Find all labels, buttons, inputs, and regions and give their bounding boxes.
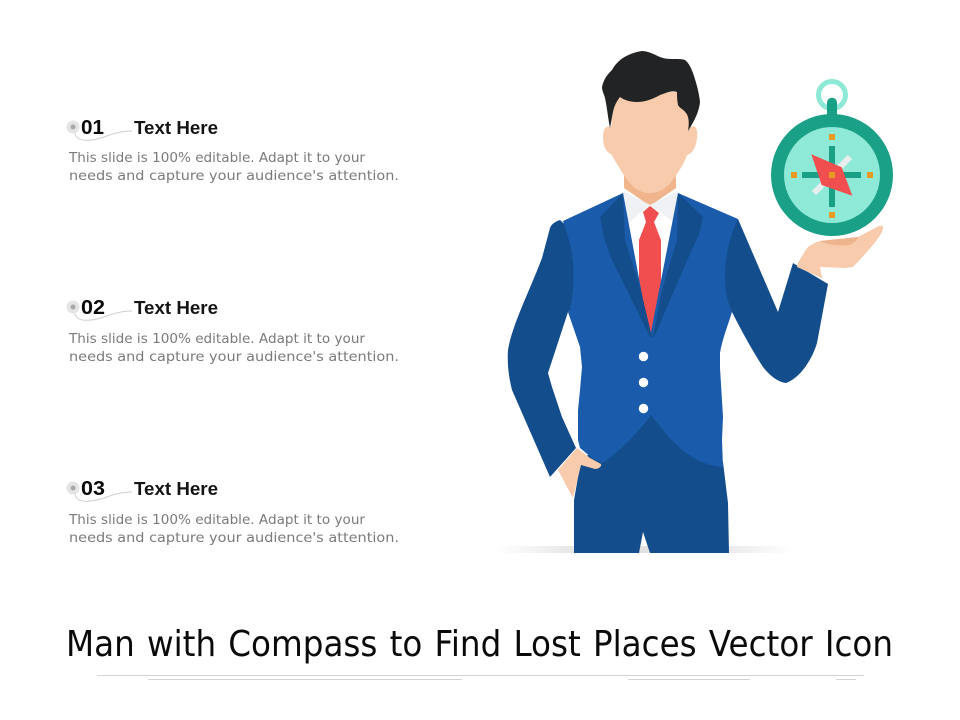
number 01: 01 <box>81 117 104 139</box>
face <box>603 92 697 193</box>
shirt cuff <box>798 265 823 278</box>
hair <box>602 51 700 131</box>
number 03: 03 <box>81 478 105 500</box>
title: Man with Compass to Find Lost Places Vector Icon <box>66 624 893 665</box>
buttons <box>639 352 648 413</box>
compass stem <box>827 98 837 120</box>
compass body <box>771 114 893 236</box>
ground shadow <box>495 546 795 553</box>
compass <box>771 82 893 236</box>
hand shading <box>820 237 858 245</box>
marker 01 <box>66 120 132 140</box>
compass cross <box>802 146 861 207</box>
compass ring <box>818 82 846 108</box>
body 02: needs and capture your audience's attention. <box>69 349 399 365</box>
text block 03 <box>66 478 399 546</box>
body 02 <box>68 331 399 365</box>
body 03: This slide is 100% editable. Adapt it to your <box>68 512 365 528</box>
cardinal markers <box>791 134 873 218</box>
text block 02 <box>66 297 399 365</box>
body 03: needs and capture your audience's attention. <box>69 530 399 546</box>
heading 01: Text Here <box>134 118 218 138</box>
body 01 <box>68 150 399 184</box>
right arm <box>725 219 828 383</box>
lapels <box>600 193 703 337</box>
body 03 <box>68 512 399 546</box>
compass face <box>784 127 880 223</box>
text block 01 <box>66 117 399 184</box>
grey needle <box>814 157 850 193</box>
shirt <box>623 192 678 335</box>
trousers <box>574 410 729 553</box>
collar <box>623 191 678 226</box>
marker 02 <box>66 300 132 320</box>
body 01: This slide is 100% editable. Adapt it to your <box>68 150 365 166</box>
heading 02: Text Here <box>134 298 218 318</box>
marker 03 <box>66 482 132 501</box>
open hand <box>797 226 883 278</box>
red needle <box>811 154 852 196</box>
jacket <box>563 193 738 467</box>
tie <box>639 206 661 335</box>
body 02: This slide is 100% editable. Adapt it to your <box>68 331 365 347</box>
number 02: 02 <box>81 297 105 319</box>
neck <box>624 170 676 206</box>
body 01: needs and capture your audience's attention. <box>69 168 399 184</box>
hand in pocket <box>558 448 601 498</box>
illustration: man in suit <box>495 51 893 553</box>
left sleeve <box>508 220 582 477</box>
heading 03: Text Here <box>134 479 218 499</box>
